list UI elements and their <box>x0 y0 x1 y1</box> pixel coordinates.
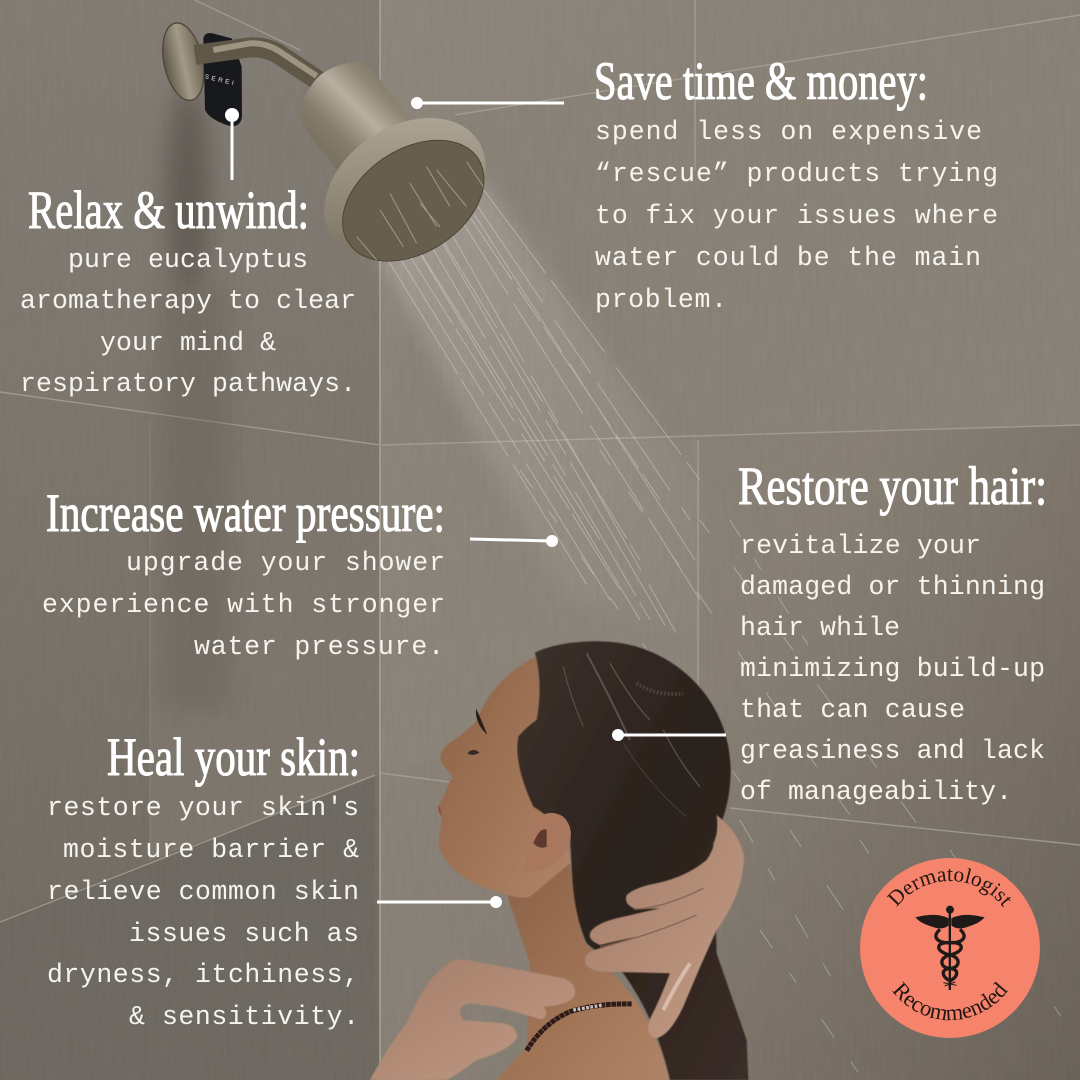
body: “rescue” products trying <box>595 159 998 189</box>
body: spend less on expensive <box>595 117 982 147</box>
body: relieve common skin <box>47 877 359 907</box>
body <box>595 117 998 315</box>
hair <box>517 641 748 1080</box>
body: upgrade your shower <box>126 548 445 578</box>
face <box>438 655 570 898</box>
shower head <box>156 19 512 288</box>
body: moisture barrier & <box>63 835 359 865</box>
body: greasiness and lack <box>740 736 1045 766</box>
heading: Increase water pressure: <box>46 483 445 543</box>
wall flange <box>156 19 210 104</box>
body <box>47 793 359 1032</box>
wet highlight <box>663 963 690 1010</box>
body: damaged or thinning <box>740 572 1045 602</box>
body: problem. <box>595 285 727 315</box>
body: minimizing build-up <box>740 654 1045 684</box>
body: & sensitivity. <box>129 1002 359 1032</box>
eye <box>467 750 479 755</box>
callout: relax and unwind <box>20 108 356 399</box>
badge top text: Dermatologist <box>886 868 1011 907</box>
body <box>740 531 1045 807</box>
body <box>20 245 356 399</box>
body: water could be the main <box>595 243 981 273</box>
body: dryness, itchiness, <box>47 960 359 990</box>
lower hand <box>370 960 575 1080</box>
badge: dermatologist recommended <box>860 858 1040 1038</box>
hair shine <box>563 653 700 817</box>
heading: Heal your skin: <box>107 727 360 787</box>
heading: Save time & money: <box>594 51 928 111</box>
eyebrow <box>476 708 487 735</box>
cylinder <box>300 62 413 175</box>
water spray <box>375 175 1070 1075</box>
body: pure eucalyptus <box>68 245 308 275</box>
person <box>370 641 748 1080</box>
pointer line <box>612 729 726 741</box>
body: issues such as <box>129 919 359 949</box>
body: that can cause <box>740 695 965 725</box>
body: of manageability. <box>740 777 1012 807</box>
head ring <box>298 89 512 288</box>
nozzles <box>357 162 483 260</box>
head face <box>320 115 506 286</box>
pointer line <box>225 108 239 180</box>
tag label: SEREI <box>204 73 237 88</box>
body: water pressure. <box>194 632 444 662</box>
tag <box>203 33 242 126</box>
body: to fix your issues where <box>595 201 998 231</box>
callout: increase water pressure <box>42 483 558 662</box>
body: experience with stronger <box>42 590 445 620</box>
body <box>42 548 445 662</box>
pointer line <box>411 97 564 109</box>
icon: caduceus <box>915 906 985 990</box>
pointer line <box>470 535 558 547</box>
lips <box>438 805 442 817</box>
heading: Relax & unwind: <box>28 180 309 240</box>
necklace <box>527 1004 632 1051</box>
arm <box>195 47 320 82</box>
body: revitalize your <box>740 531 981 561</box>
finger creases <box>600 888 703 947</box>
body: restore your skin's <box>47 793 359 823</box>
body: aromatherapy to clear <box>20 286 356 316</box>
pointer line <box>377 896 502 908</box>
body: your mind & <box>100 328 276 358</box>
callout: restore your hair <box>612 456 1047 807</box>
callout: save time and money <box>411 51 998 315</box>
body: hair while <box>740 613 900 643</box>
ear <box>523 813 571 873</box>
body: respiratory pathways. <box>20 369 356 399</box>
callout: heal your skin <box>47 727 502 1032</box>
raised hand <box>585 815 744 1038</box>
neck and shoulder <box>497 863 670 1080</box>
badge bottom text: Recommended <box>892 981 1008 1020</box>
